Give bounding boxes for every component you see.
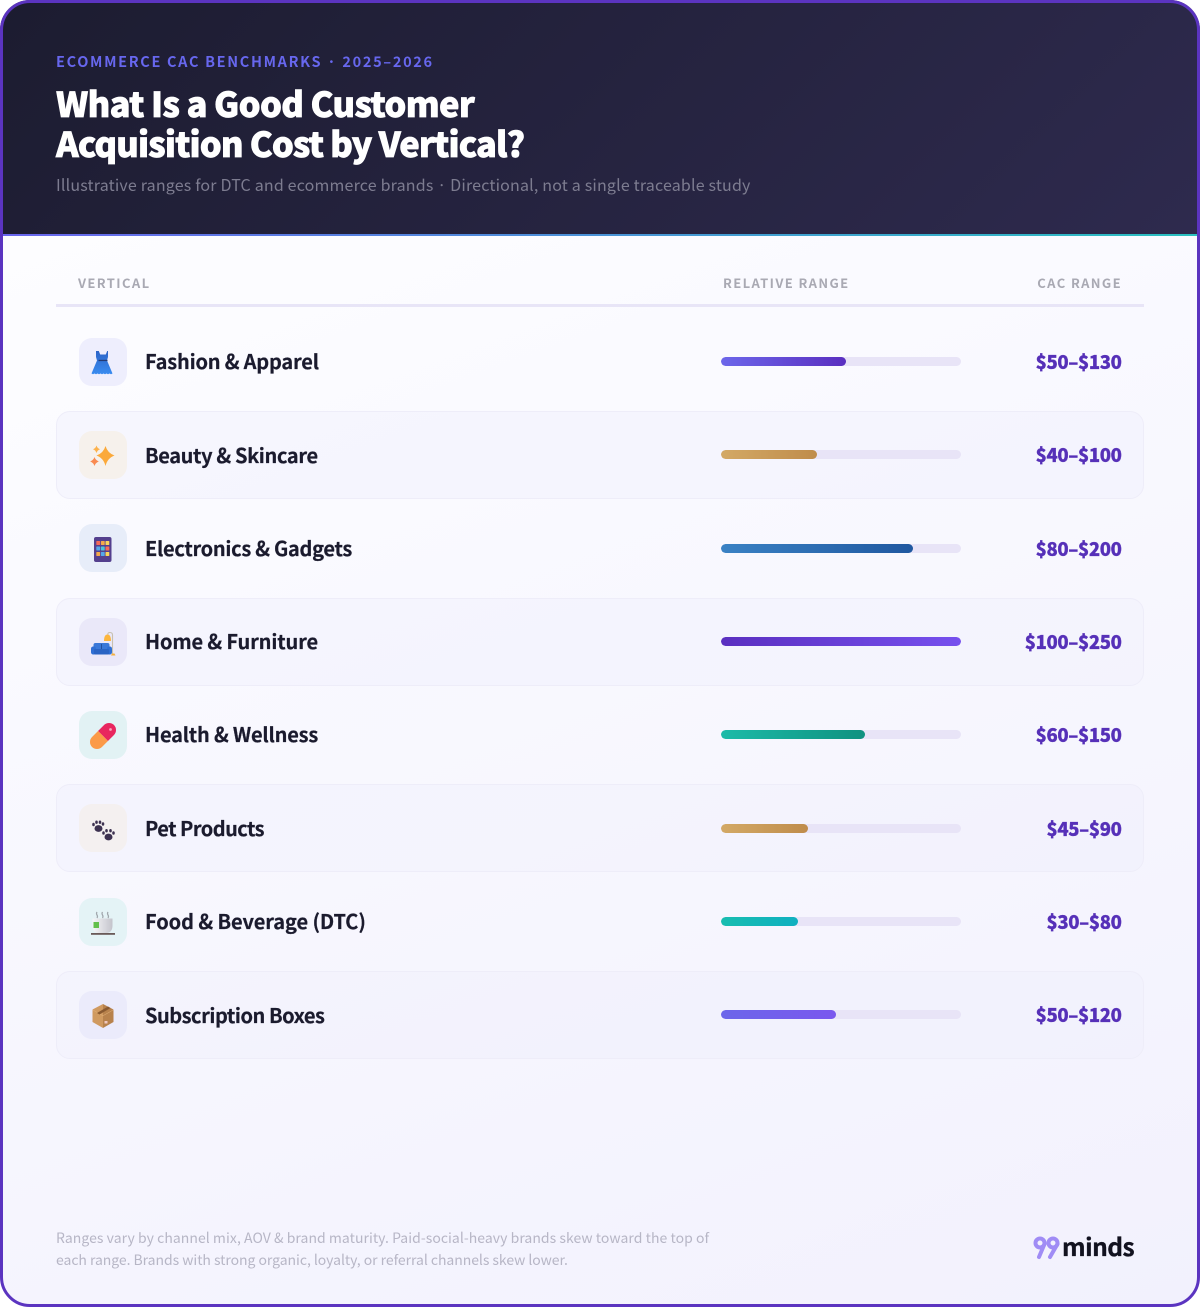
value: Electronics: $80–$200 (1036, 536, 1122, 562)
bar: Food (721, 917, 961, 926)
column heading: CAC range: CAC RANGE (1037, 272, 1122, 292)
label: Health: Health & Wellness (145, 719, 318, 748)
icon: sparkles (79, 431, 127, 479)
value: Home: $100–$250 (1025, 628, 1122, 654)
title: Acquisition Cost by Vertical? (56, 117, 524, 167)
icon: paw prints (79, 804, 127, 852)
footnote: each range. Brands with strong organic, loyalty, or referral channels skew lower. (56, 1250, 568, 1270)
bar: Health (721, 730, 961, 739)
title: What Is a Good Customer (56, 77, 474, 127)
value: Fashion: $50–$130 (1036, 348, 1122, 374)
bar: Pet (721, 824, 961, 833)
title (55, 77, 524, 167)
icon: pill (79, 711, 127, 759)
label: Beauty: Beauty & Skincare (145, 440, 318, 468)
bar: Fashion (721, 357, 961, 366)
row background: Subscription (56, 971, 1144, 1059)
logo mark (1034, 1236, 1060, 1260)
label: Fashion: Fashion & Apparel (145, 346, 319, 375)
icon: sofa and lamp (79, 618, 127, 666)
subtitle: Illustrative ranges for DTC and ecommerce brands · Directional, not a single traceable study (56, 172, 751, 196)
footnote (56, 1228, 710, 1270)
row background: Beauty (56, 411, 1144, 499)
label: Subscription: Subscription Boxes (145, 1000, 324, 1028)
icon: box (79, 991, 127, 1039)
value: Beauty: $40–$100 (1036, 442, 1122, 468)
label: Pet: Pet Products (145, 813, 264, 842)
column heading: relative range: RELATIVE RANGE (723, 272, 850, 292)
icon: calculator (79, 524, 127, 572)
bar: Electronics (721, 544, 961, 553)
value: Food: $30–$80 (1047, 908, 1122, 934)
row background: Home (56, 598, 1144, 686)
bar: Beauty (721, 450, 961, 459)
footnote: Ranges vary by channel mix, AOV & brand maturity. Paid-social-heavy brands skew toward the top of (56, 1228, 709, 1248)
logo: 99minds (1034, 1229, 1134, 1264)
bar: Home (721, 637, 961, 646)
value: Pet: $45–$90 (1047, 816, 1122, 842)
icon: dress (79, 338, 127, 386)
value: Subscription: $50–$120 (1036, 1002, 1122, 1028)
label: Electronics: Electronics & Gadgets (145, 533, 352, 562)
icon: hot beverage (79, 898, 127, 946)
bar: Subscription (721, 1010, 961, 1019)
column heading: vertical: VERTICAL (78, 272, 150, 292)
label: Home: Home & Furniture (145, 626, 318, 655)
label: Food: Food & Beverage (DTC) (145, 906, 366, 935)
value: Health: $60–$150 (1036, 722, 1122, 748)
logo wordmark: minds (1062, 1229, 1134, 1264)
panel: header (0, 0, 1200, 236)
row background: Pet (56, 784, 1144, 872)
eyebrow label: ECOMMERCE CAC BENCHMARKS · 2025–2026 (56, 50, 434, 72)
